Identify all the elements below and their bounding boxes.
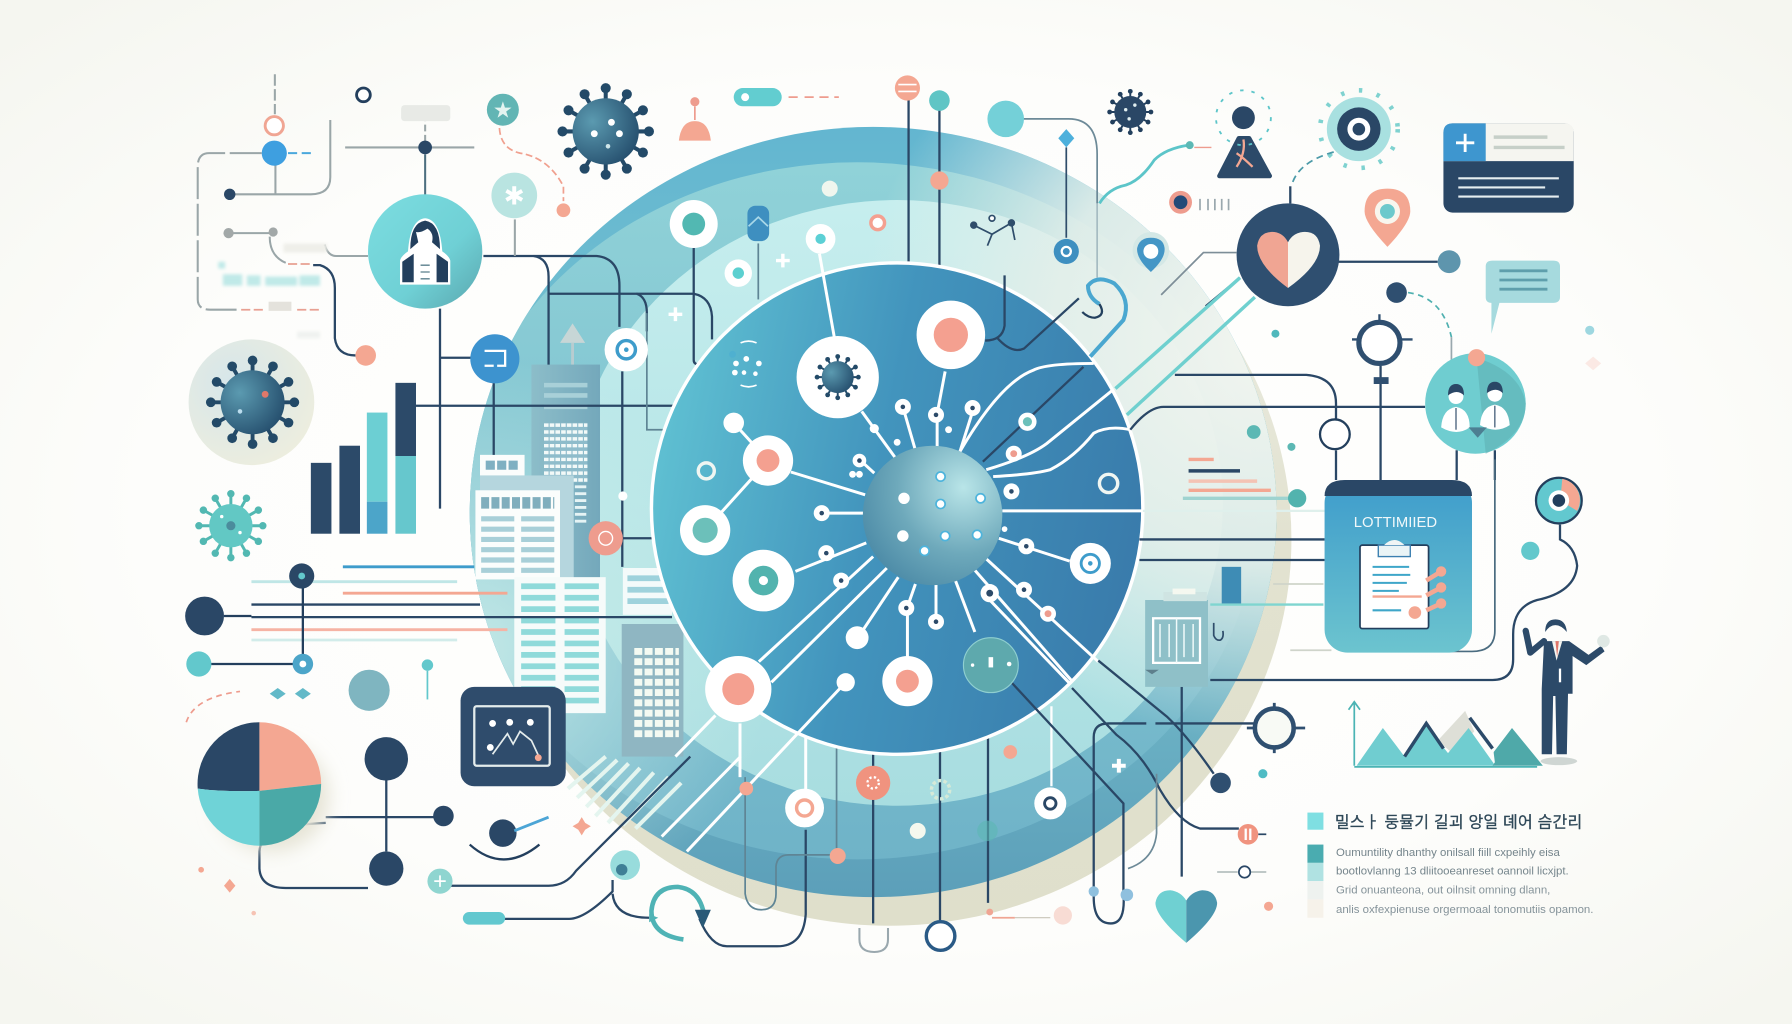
icon: blue badge — [470, 334, 519, 383]
node: teal left — [680, 505, 730, 555]
stripe lines left — [251, 567, 507, 640]
icon: circular arrow — [649, 887, 711, 939]
icon: people badge — [1425, 349, 1526, 454]
right side mini bars — [1183, 425, 1306, 507]
left nodes and connectors — [185, 563, 433, 722]
teal dot — [1521, 542, 1539, 560]
dark network lines — [983, 119, 1577, 923]
icon: star badges: ✱ — [504, 183, 525, 211]
concentric rings backdrop — [457, 127, 1291, 926]
node: teal sphere — [963, 638, 1018, 693]
node graph under chart — [365, 737, 454, 894]
upper ring nodes — [669, 181, 885, 321]
icon: star badges — [487, 94, 537, 218]
legend block: 밀스ㅏ 둥뮬기 길괴 앙일 뎨어 슴간리 — [1335, 813, 1582, 831]
panel: main circle — [651, 263, 1143, 754]
clipboard — [1360, 540, 1446, 629]
icon: heart badge — [1237, 203, 1339, 306]
icon: person with triangle — [1216, 90, 1271, 176]
icon: speech bubble — [1486, 261, 1560, 334]
legend block: anlis oxfexpienuse orgermoaal tonomutiis opamon. — [1336, 904, 1593, 916]
icon: teal squiggle — [1099, 141, 1211, 203]
icon: teal virus — [195, 490, 267, 561]
navy curve to coral dot — [313, 265, 355, 355]
dotted micro virus — [729, 341, 762, 387]
bottom left pill and teal circle — [463, 850, 640, 925]
legend block — [1307, 813, 1593, 918]
node: coral bottom — [882, 656, 933, 706]
left circuit lines — [251, 97, 988, 946]
legend block: bootlovlanng 13 dliitooeanreset oannoil licxjpt. — [1336, 865, 1569, 877]
icon: gear ring — [1352, 314, 1413, 384]
ring markers in main circle — [698, 463, 1118, 493]
icon: connected dots right — [1271, 250, 1594, 360]
icon: large navy virus top — [557, 83, 654, 180]
small satellite nodes around core — [723, 399, 1056, 691]
scattered accents — [198, 357, 1601, 915]
icon: heart — [1155, 890, 1217, 943]
top-left circuit — [198, 74, 515, 310]
left virus badge — [189, 339, 314, 465]
dashed coral path — [499, 128, 570, 217]
icon: coral pin and pill — [679, 88, 839, 141]
panel: status card: LOTTIMIIED — [1354, 515, 1437, 531]
panel: info card top right — [1443, 123, 1574, 213]
node: teal target — [733, 550, 794, 611]
icon: small coral dial — [1169, 191, 1229, 214]
lower right dots — [1003, 745, 1273, 911]
icon: top dots on stems — [895, 75, 1024, 190]
node: virus badge — [797, 336, 879, 418]
top-right diagonal teal stripes — [1115, 278, 1255, 415]
icon: hook curve — [1082, 279, 1126, 357]
legend block: Oumuntility dhanthy onilsall fiill cxpeihly eisa — [1336, 847, 1560, 859]
icon: diamond and ring on line — [1054, 129, 1079, 264]
icon: molecule — [971, 215, 1015, 246]
bar chart — [311, 383, 416, 534]
thin grey lines in ring — [647, 243, 837, 910]
icon: white target badge — [605, 328, 648, 371]
outer connector around card — [1417, 459, 1495, 651]
node: coral left — [743, 435, 793, 486]
icon: eye with pointer — [470, 817, 591, 859]
icon: donut ring — [1536, 478, 1582, 523]
icon: gear right — [1247, 703, 1305, 753]
icon: coral pin — [1365, 189, 1410, 247]
bottom ring nodes — [739, 766, 1072, 952]
pie chart — [198, 722, 329, 851]
panel: status card — [1325, 480, 1472, 653]
mini mountain chart — [1349, 702, 1543, 767]
chart tile — [461, 687, 566, 786]
node: blue target right — [1070, 543, 1111, 584]
icon: doors panel — [1145, 567, 1241, 687]
icon: small navy virus top right — [1107, 89, 1153, 135]
icon: star badges: ★ — [494, 100, 512, 121]
icon: blue map pin — [1133, 232, 1169, 272]
central virus core — [863, 446, 1002, 585]
ring on connector — [1320, 419, 1350, 449]
icon: eye target — [1291, 90, 1398, 186]
legend block: Grid onuanteona, out oilnsit omning dlann, — [1336, 885, 1550, 897]
icon: small white dot on line — [618, 491, 627, 501]
buildings cluster — [475, 323, 683, 829]
icon: person badge — [368, 194, 482, 309]
inner network lines — [662, 254, 1325, 851]
icon: coral gear — [589, 521, 623, 555]
node: coral large — [917, 301, 985, 369]
top-left markers — [218, 88, 450, 366]
businessman — [1526, 619, 1610, 765]
connector lines right of doors — [1210, 584, 1331, 650]
node: coral bottom left — [705, 656, 771, 722]
